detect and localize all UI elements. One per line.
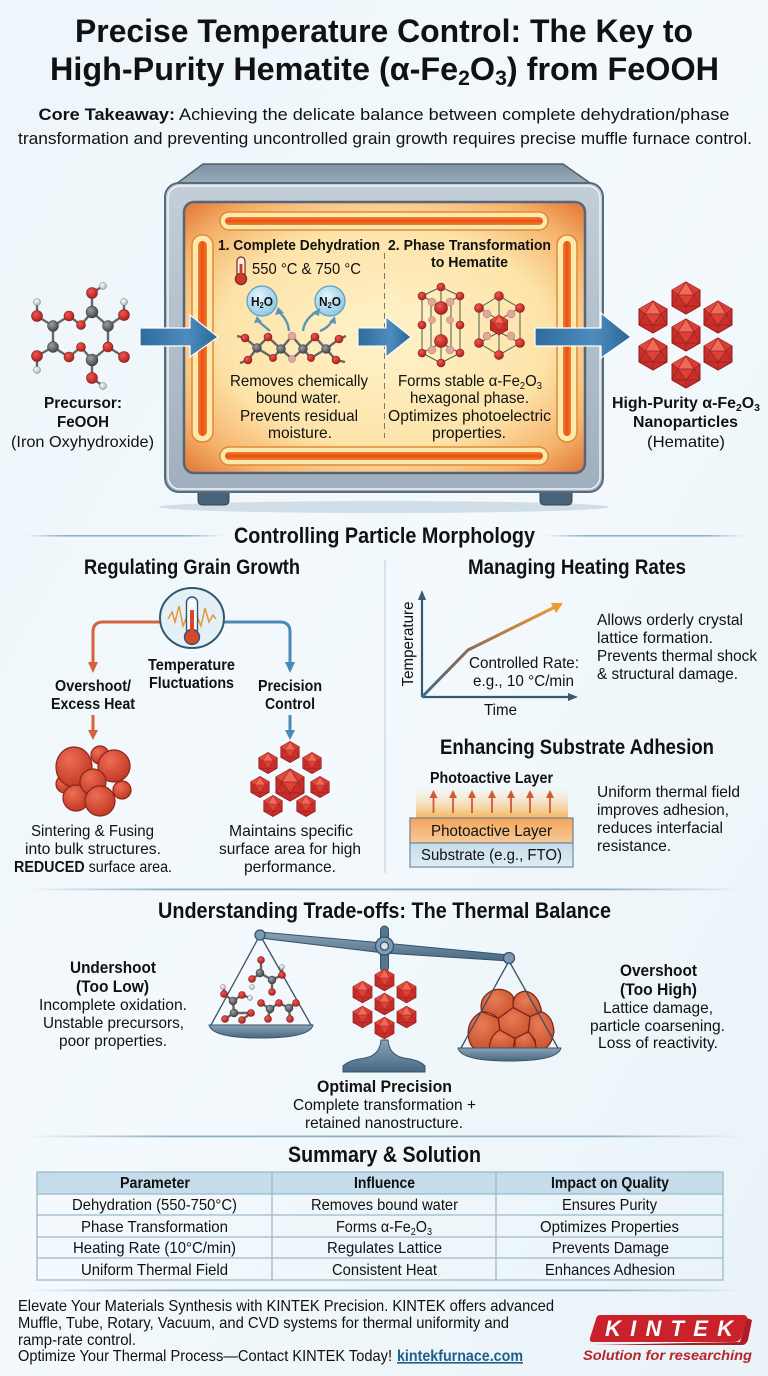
- label: photoactive layer top: Photoactive Layer: [430, 770, 553, 787]
- icon: sintered cluster: [56, 746, 131, 816]
- text: sintering: REDUCED surface area.: [14, 859, 172, 876]
- table row: phase transformation: 3: [427, 1227, 432, 1238]
- substrate layer: [410, 843, 573, 867]
- text: overshoot: [590, 961, 725, 1052]
- step 2 description: 2: [520, 381, 526, 392]
- footer call to action: Optimize Your Thermal Process—Contact KINTEK Today!: [18, 1348, 392, 1365]
- label: overshoot: [51, 678, 136, 713]
- title: 2: [458, 67, 470, 90]
- diagram: substrate layers: [410, 770, 573, 867]
- text: overshoot: Overshoot: [620, 961, 697, 980]
- core takeaway text: Core Takeaway: Achieving the delicate balance between complete dehydration/phase: [38, 105, 730, 124]
- text: undershoot: Undershoot: [70, 958, 156, 977]
- step 1 description: Removes chemically: [230, 373, 368, 390]
- text: sintering: into bulk structures.: [25, 841, 161, 858]
- text: overshoot: (Too High): [620, 980, 697, 999]
- left pan strings: [211, 935, 311, 1025]
- table row: phase transformation: 2: [411, 1227, 416, 1238]
- footer call to action: Muffle, Tube, Rotary, Vacuum, and CVD systems for thermal uniformity and: [18, 1315, 509, 1332]
- bubble: N2O: 2: [328, 301, 332, 310]
- step 2 description: properties.: [432, 425, 506, 442]
- step 1 description: moisture.: [268, 425, 332, 442]
- label: overshoot: Overshoot/: [55, 678, 131, 695]
- footer call to action: [18, 1298, 554, 1365]
- arrow: to controlled crystals: [285, 715, 295, 740]
- icon: thermometer: [235, 257, 247, 285]
- text: heating rate benefit: Prevents thermal shock: [597, 648, 758, 665]
- table row: heating rate: Heating Rate (10°C/min): [73, 1240, 236, 1257]
- bubble: H2O: [247, 286, 277, 316]
- table row: dehydration: Ensures Purity: [562, 1197, 657, 1214]
- photoactive layer: Photoactive Layer: [431, 823, 553, 840]
- precursor label: [11, 395, 154, 451]
- rate annotation: Controlled Rate:: [469, 655, 579, 672]
- left pan: [209, 1025, 313, 1038]
- furnace feet: [198, 490, 572, 505]
- core takeaway text: [18, 105, 752, 148]
- step 1 description: Prevents residual: [240, 408, 358, 425]
- title: ) from FeOOH: [507, 51, 719, 87]
- title: O: [470, 51, 495, 87]
- axis label: time: Time: [484, 702, 517, 719]
- table row: dehydration: Removes bound water: [311, 1197, 459, 1214]
- product label: 3: [754, 402, 760, 414]
- text: optimal precision: retained nanostructure.: [305, 1115, 463, 1132]
- icon: hematite nanoparticles: [639, 282, 732, 388]
- panel: grain growth flow: [14, 588, 361, 876]
- text: heating rate benefit: & structural damage.: [597, 666, 738, 683]
- bubble: H2O: O: [264, 294, 273, 309]
- step 1 description: bound water.: [256, 390, 341, 407]
- step 2 heading: [388, 238, 551, 271]
- product label: Nanoparticles: [633, 414, 738, 431]
- text: adhesion benefit: reduces interfacial: [597, 820, 723, 837]
- step 2 description: Forms stable α-Fe: [398, 373, 528, 390]
- substrate layer: Substrate (e.g., FTO): [421, 847, 562, 864]
- heat zone: [416, 788, 568, 818]
- scale joints: [255, 930, 514, 964]
- icon: controlled crystals: [251, 741, 329, 817]
- table row: uniform thermal field: [81, 1262, 675, 1279]
- ramp line: [422, 603, 563, 697]
- heading: managing heating rates: Managing Heating Rates: [468, 556, 686, 579]
- table row: heating rate: Prevents Damage: [552, 1240, 669, 1257]
- chart axes: [418, 590, 578, 701]
- text: sintering: Sintering & Fusing: [31, 823, 154, 840]
- arrow: precursor into furnace: [140, 315, 218, 357]
- title: Precise Temperature Control: The Key to: [75, 13, 693, 49]
- precursor label: (Iron Oxyhydroxide): [11, 434, 154, 451]
- scale beam: [260, 932, 509, 961]
- heater: bottom: [220, 447, 548, 465]
- label: temperature fluctuations: Fluctuations: [149, 675, 234, 692]
- bubble: N2O: N: [319, 294, 328, 309]
- text: precision outcome: [219, 823, 361, 876]
- table row: phase transformation: Optimizes Properties: [540, 1219, 679, 1236]
- table row: dehydration: [72, 1197, 657, 1214]
- website link: kintekfurnace.com: [397, 1348, 523, 1365]
- step 2 heading: 2. Phase Transformation: [388, 238, 551, 254]
- table row: phase transformation: O: [416, 1219, 427, 1236]
- rate annotation: e.g., 10 °C/min: [473, 673, 574, 690]
- furnace chamber: [184, 202, 585, 473]
- text: heating rate benefit: Allows orderly crystal: [597, 612, 743, 629]
- precursor molecule icon: [32, 282, 130, 390]
- step 1 heading: 1. Complete Dehydration: [218, 238, 380, 254]
- title: [50, 13, 719, 90]
- furnace: [159, 164, 609, 513]
- arrow: precision branch: [222, 622, 295, 673]
- text: heating rate benefit: lattice formation.: [597, 630, 713, 647]
- text: undershoot: Unstable precursors,: [43, 1015, 184, 1032]
- heat arrows: [430, 790, 554, 813]
- footer call to action: Elevate Your Materials Synthesis with KINTEK Precision. KINTEK offers advanced: [18, 1298, 554, 1315]
- text: optimal precision: Optimal Precision: [317, 1077, 452, 1096]
- table row: phase transformation: Forms α-Fe: [336, 1219, 419, 1236]
- chart: heating ramp: [400, 590, 579, 719]
- step 1 description: [230, 373, 368, 442]
- table row: phase transformation: [81, 1219, 679, 1238]
- step 2 description: hexagonal phase.: [410, 390, 529, 407]
- product label: (Hematite): [647, 434, 725, 451]
- text: precision outcome: performance.: [244, 859, 336, 876]
- furnace shadow: [159, 501, 609, 513]
- right pan: [458, 1048, 561, 1061]
- label: precision control: Precision: [258, 678, 322, 695]
- scale post: [380, 926, 388, 972]
- table row: phase transformation: Phase Transformation: [81, 1219, 228, 1236]
- logo tagline: Solution for researching: [583, 1348, 753, 1363]
- label: precision control: [258, 678, 322, 713]
- bubble: H2O: 2: [260, 301, 264, 310]
- text: precision outcome: Maintains specific: [229, 823, 353, 840]
- table header row: Parameter: [120, 1175, 190, 1192]
- logo shadow: [593, 1318, 752, 1345]
- table grid: [37, 1172, 723, 1280]
- right pan strings: [461, 961, 558, 1048]
- heading: enhancing substrate adhesion: Enhancing Substrate Adhesion: [440, 736, 714, 759]
- axis label: temperature: Temperature: [400, 601, 417, 686]
- right pan coarse particles: [468, 989, 554, 1048]
- text: overshoot: particle coarsening.: [590, 1018, 725, 1035]
- text: adhesion benefit: resistance.: [597, 838, 671, 855]
- footer call to action: ramp-rate control.: [18, 1332, 136, 1349]
- title: High-Purity Hematite (α-Fe: [50, 51, 454, 87]
- furnace body: [165, 183, 603, 492]
- table row: uniform thermal field: Enhances Adhesion: [545, 1262, 675, 1279]
- heater: right: [557, 235, 577, 442]
- step 2 description: 3: [537, 381, 542, 392]
- crystal: unit cell A: [418, 283, 464, 367]
- step divider: [384, 253, 386, 438]
- text: overshoot: Lattice damage,: [603, 1000, 713, 1017]
- heater: top: [220, 212, 548, 230]
- text: optimal precision: [293, 1077, 476, 1132]
- logo badge: [590, 1315, 747, 1342]
- precursor label: Precursor:: [44, 395, 122, 412]
- heading: summary and solution: Summary & Solution: [288, 1142, 481, 1167]
- text: heating rate benefit: [597, 612, 758, 683]
- icon: thermometer with fluctuation: [160, 588, 224, 648]
- icon: balance scale: [209, 926, 561, 1072]
- scale base: [343, 1040, 425, 1072]
- bubble: N2O: O: [332, 294, 341, 309]
- heater: left: [192, 235, 213, 442]
- table row: dehydration: Dehydration (550-750°C): [72, 1197, 237, 1214]
- product label: 2: [736, 402, 742, 414]
- title: 3: [495, 67, 507, 90]
- text: adhesion benefit: Uniform thermal field: [597, 784, 740, 801]
- rate annotation: [469, 655, 579, 690]
- step 2 description: O: [525, 373, 537, 390]
- core takeaway text: transformation and preventing uncontrolled grain growth requires precise muffle furnace control.: [18, 129, 752, 148]
- text: undershoot: poor properties.: [59, 1033, 167, 1050]
- table header row: [37, 1172, 723, 1194]
- product label: High-Purity α-Fe: [612, 395, 736, 412]
- heading: controlling particle morphology: Controlling Particle Morphology: [234, 523, 536, 548]
- table row: heating rate: [73, 1240, 669, 1257]
- arrow: to sintered cluster: [88, 715, 98, 740]
- step 2 description: [388, 373, 551, 442]
- arrow: furnace to product: [535, 313, 631, 358]
- label: temperature fluctuations: [148, 657, 235, 692]
- heading: trade-offs: Understanding Trade-offs: The Thermal Balance: [158, 898, 611, 923]
- text: precision outcome: surface area for high: [219, 841, 361, 858]
- text: sintering: [14, 823, 172, 876]
- text: adhesion benefit: [597, 784, 740, 855]
- table: summary: [37, 1172, 723, 1280]
- table row: uniform thermal field: Consistent Heat: [332, 1262, 438, 1279]
- arrow: overshoot branch: [88, 622, 162, 673]
- table row: uniform thermal field: Uniform Thermal Field: [81, 1262, 228, 1279]
- step 2 heading: to Hematite: [431, 255, 508, 271]
- precursor label: FeOOH: [57, 414, 109, 431]
- crystal: unit cell B: [474, 292, 524, 360]
- text: undershoot: Incomplete oxidation.: [39, 997, 187, 1014]
- label: overshoot: Excess Heat: [51, 696, 136, 713]
- centre hematite crystals: [353, 969, 416, 1039]
- text: overshoot: Loss of reactivity.: [598, 1035, 718, 1052]
- heading: regulating grain growth: Regulating Grain Growth: [84, 556, 300, 579]
- left pan precursor molecules: [220, 956, 300, 1024]
- vapour arrows: [254, 307, 336, 331]
- temperature range: 550 °C & 750 °C: [252, 261, 361, 278]
- product label: O: [742, 395, 754, 412]
- arrow: between steps: [358, 317, 411, 357]
- molecule: dehydrating chain: [237, 332, 346, 364]
- bubble: H2O: H: [251, 294, 260, 309]
- step 2 description: Optimizes photoelectric: [388, 408, 551, 425]
- label: temperature fluctuations: Temperature: [148, 657, 235, 674]
- text: optimal precision: Complete transformation +: [293, 1097, 476, 1114]
- label: precision control: Control: [265, 696, 315, 713]
- text: undershoot: (Too Low): [76, 977, 149, 996]
- table header row: Impact on Quality: [551, 1175, 669, 1192]
- text: undershoot: [39, 958, 187, 1050]
- product label: [612, 395, 760, 451]
- logo: KINTEK: [583, 1315, 753, 1363]
- furnace top panel: [168, 164, 600, 190]
- logo wordmark: KINTEK: [605, 1316, 735, 1341]
- photoactive layer: [410, 818, 573, 843]
- table row: heating rate: Regulates Lattice: [327, 1240, 442, 1257]
- text: adhesion benefit: improves adhesion,: [597, 802, 729, 819]
- table header row: Influence: [354, 1175, 415, 1192]
- bubble: N2O: [315, 286, 345, 316]
